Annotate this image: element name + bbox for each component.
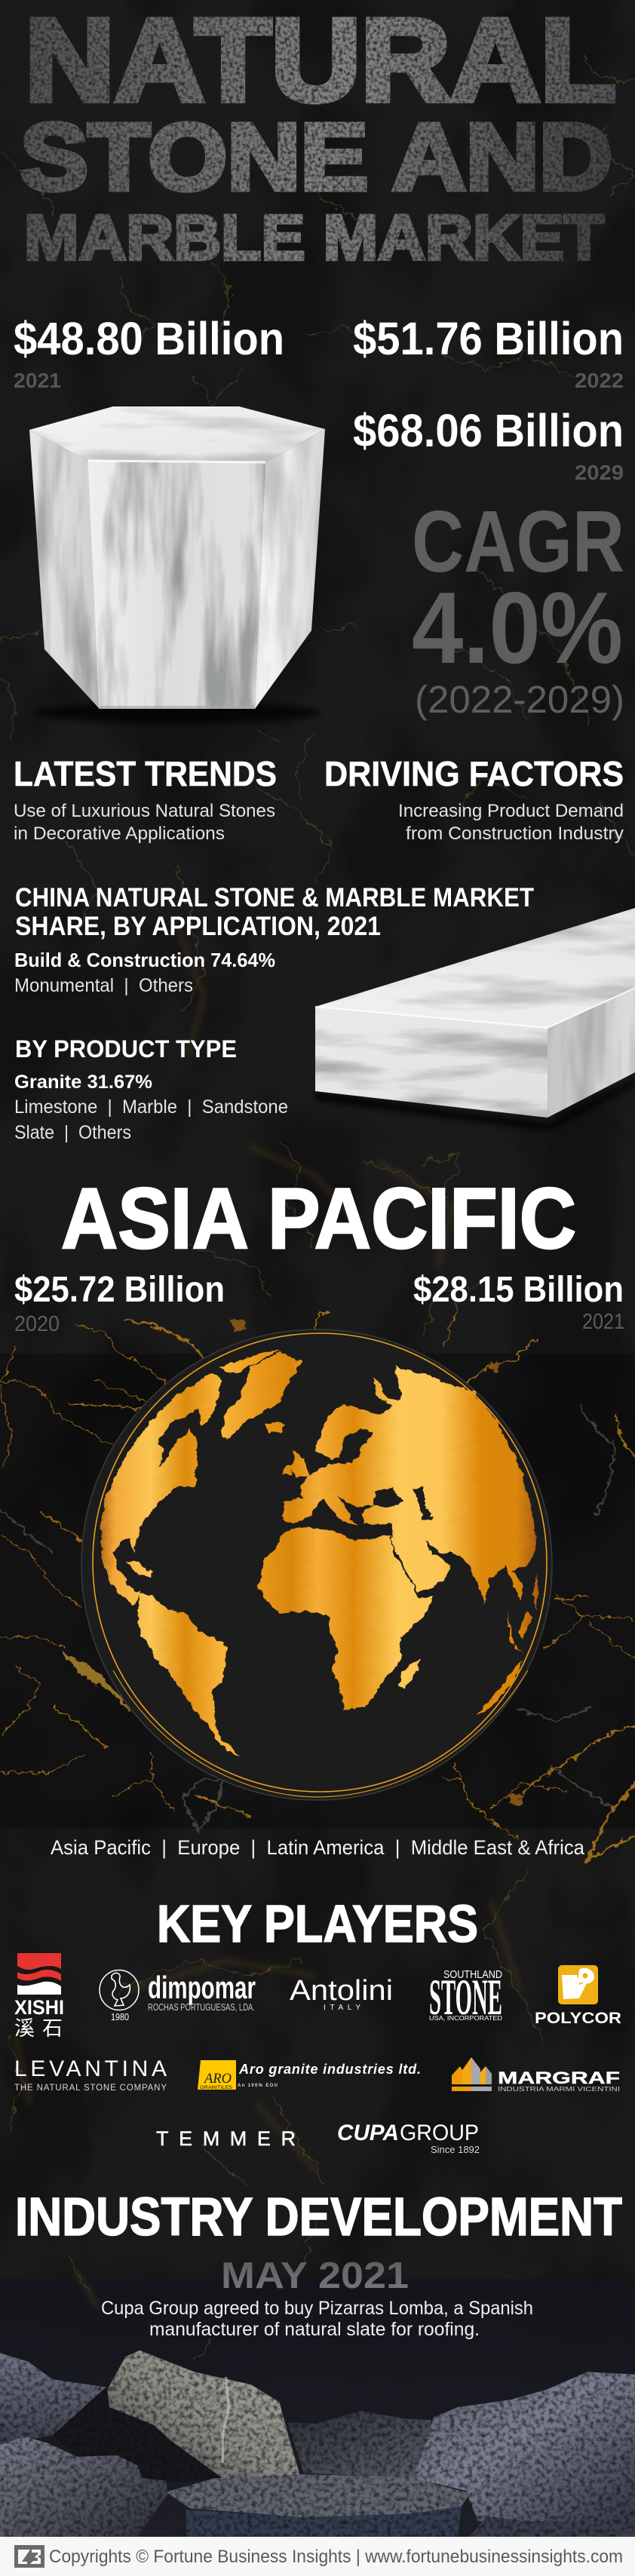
stat: 2022 market size: 2022 — [575, 369, 624, 392]
logo: Southland Stone: SOUTHLAND — [443, 1968, 502, 1981]
rock: centre tall — [107, 2351, 299, 2478]
logo: Margraf: MARGRAF — [498, 2068, 620, 2087]
logo: Aro Granite: ARO — [203, 2071, 232, 2087]
marble slab — [313, 905, 635, 1131]
rocks and stone pedestal — [0, 2351, 635, 2537]
logo: Xishi: XISHI — [14, 1996, 64, 2019]
pedestal front — [186, 2506, 462, 2537]
stat: 2029 market size: 2029 — [575, 461, 624, 484]
logo: Dimpomar: ROCHAS PORTUGUESAS, LDA. — [148, 2001, 255, 2013]
application share text — [14, 883, 534, 996]
development description: manufacturer of natural slate for roofing. — [149, 2319, 480, 2340]
logo: Dimpomar: dimpomar — [148, 1970, 256, 2005]
region heading: Asia Pacific: ASIA PACIFIC — [61, 1171, 576, 1267]
Greenland — [222, 1352, 302, 1442]
Iceland — [266, 1423, 284, 1434]
stat: 2021 market size: $48.80 Billion — [14, 313, 284, 364]
driving factors: from Construction Industry — [406, 823, 624, 844]
logo: Aro Granite: An 100% EOU — [238, 2084, 278, 2088]
driving factors — [324, 754, 624, 844]
pedestal top — [166, 2474, 470, 2517]
title — [20, 0, 616, 273]
product type text: Slate | Others — [14, 1122, 131, 1143]
arctic islands — [216, 1350, 280, 1374]
stat: Asia Pacific 2020 — [14, 1270, 225, 1336]
logo: Southland Stone: USA, INCORPORATED — [429, 2014, 502, 2022]
logo: Southland Stone — [429, 1968, 502, 2026]
Africa — [259, 1528, 434, 1710]
driving factors: DRIVING FACTORS — [324, 754, 624, 793]
title line 3: MARBLE MARKET — [24, 202, 604, 273]
rock: front right — [470, 2516, 635, 2537]
rock: right large — [413, 2372, 635, 2521]
driving factors: Increasing Product Demand — [398, 801, 624, 821]
region list: Asia Pacific | Europe | Latin America | Middle East & Africa — [51, 1836, 585, 1859]
Indonesia — [508, 1612, 532, 1651]
footer bar — [0, 2537, 635, 2576]
Black Sea — [373, 1487, 403, 1507]
stat: 2029 market size — [353, 405, 624, 484]
rock shadow gap — [53, 2387, 222, 2483]
grey vein patches — [0, 1407, 615, 1831]
latest trends: Use of Luxurious Natural Stones — [14, 801, 275, 821]
CAGR callout — [412, 492, 624, 721]
latest trends: LATEST TRENDS — [14, 754, 277, 793]
title line 2: STONE AND — [20, 105, 612, 210]
logo: Antolini: Antolini — [290, 1975, 393, 2007]
stat: Asia Pacific 2021 — [413, 1270, 624, 1334]
logo: Margraf — [452, 2057, 620, 2093]
product type text — [14, 1035, 288, 1143]
product type text: BY PRODUCT TYPE — [15, 1035, 237, 1063]
Ireland — [284, 1464, 293, 1474]
logo: Levantina: THE NATURAL STONE COMPANY — [14, 2084, 167, 2093]
logo: Dimpomar: 1980 — [111, 2012, 129, 2022]
logo: Xishi — [14, 1953, 64, 2040]
application share text: SHARE, BY APPLICATION, 2021 — [15, 912, 381, 941]
product type text: Granite 31.67% — [14, 1072, 152, 1093]
Great Britain — [293, 1451, 310, 1478]
logo: Aro Granite: GRANITILES — [200, 2086, 232, 2090]
rock: front left — [0, 2436, 168, 2537]
rock: middle back — [287, 2411, 431, 2478]
Madagascar — [399, 1658, 419, 1688]
stat: Asia Pacific 2021: 2021 — [582, 1310, 624, 1334]
product type text: Limestone | Marble | Sandstone — [14, 1096, 288, 1118]
Caspian Sea — [413, 1487, 434, 1520]
logo: Aro Granite — [198, 2060, 421, 2090]
key players heading: KEY PLAYERS — [157, 1894, 478, 1953]
stat: Asia Pacific 2020: $25.72 Billion — [14, 1270, 225, 1310]
stat: 2021 market size — [14, 313, 284, 392]
continents — [100, 1350, 538, 1757]
development description: Cupa Group agreed to buy Pizarras Lomba, a Spanish — [101, 2298, 533, 2319]
Australia sliver — [476, 1659, 523, 1716]
stat: 2021 market size: 2021 — [14, 369, 61, 392]
North America — [100, 1372, 222, 1606]
logo: Aro Granite: Aro granite industries ltd. — [238, 2062, 421, 2077]
infographic canvas: STONE — [429, 1968, 502, 2026]
marble hexagonal column — [23, 403, 332, 723]
logo: Dimpomar — [100, 1970, 256, 2022]
South America — [138, 1593, 241, 1757]
logo: Polycor — [535, 1965, 621, 2027]
logo: Cupa Group — [337, 2121, 480, 2155]
logo: Levantina — [14, 2056, 167, 2093]
date: MAY 2021 — [221, 2256, 409, 2296]
CAGR callout: (2022-2029) — [415, 678, 624, 721]
logo: Levantina: LEVANTINA — [14, 2056, 167, 2081]
Eurasia — [283, 1366, 537, 1604]
logo: Cupa Group: Since 1892 — [431, 2144, 480, 2155]
logo: Xishi: 溪石 — [14, 2017, 63, 2040]
application share text: Build & Construction 74.64% — [14, 949, 275, 971]
development description — [101, 2298, 533, 2340]
rock: back left — [0, 2353, 106, 2446]
logo: Cupa Group: CUPA — [337, 2121, 399, 2145]
logo: Temmer: TEMMER — [156, 2127, 296, 2150]
stat: Asia Pacific 2020: 2020 — [14, 1312, 60, 1336]
stat: 2022 market size — [353, 313, 624, 392]
application share text: Monumental | Others — [14, 975, 193, 996]
gold globe — [81, 1329, 552, 1800]
Fortune Business Insights logo — [14, 2545, 44, 2568]
logo: Margraf: INDUSTRIA MARMI VICENTINI — [498, 2086, 620, 2093]
Cuba — [127, 1561, 152, 1577]
latest trends — [14, 754, 277, 844]
application share text: CHINA NATURAL STONE & MARBLE MARKET — [15, 883, 534, 912]
logo: Cupa Group: GROUP — [400, 2121, 479, 2145]
logo: Antolini: ITALY — [324, 2004, 360, 2012]
logo: Polycor: POLYCOR — [535, 2010, 621, 2027]
latest trends: in Decorative Applications — [14, 823, 225, 844]
gold veins around globe — [0, 1305, 635, 1860]
Japan — [534, 1573, 538, 1610]
